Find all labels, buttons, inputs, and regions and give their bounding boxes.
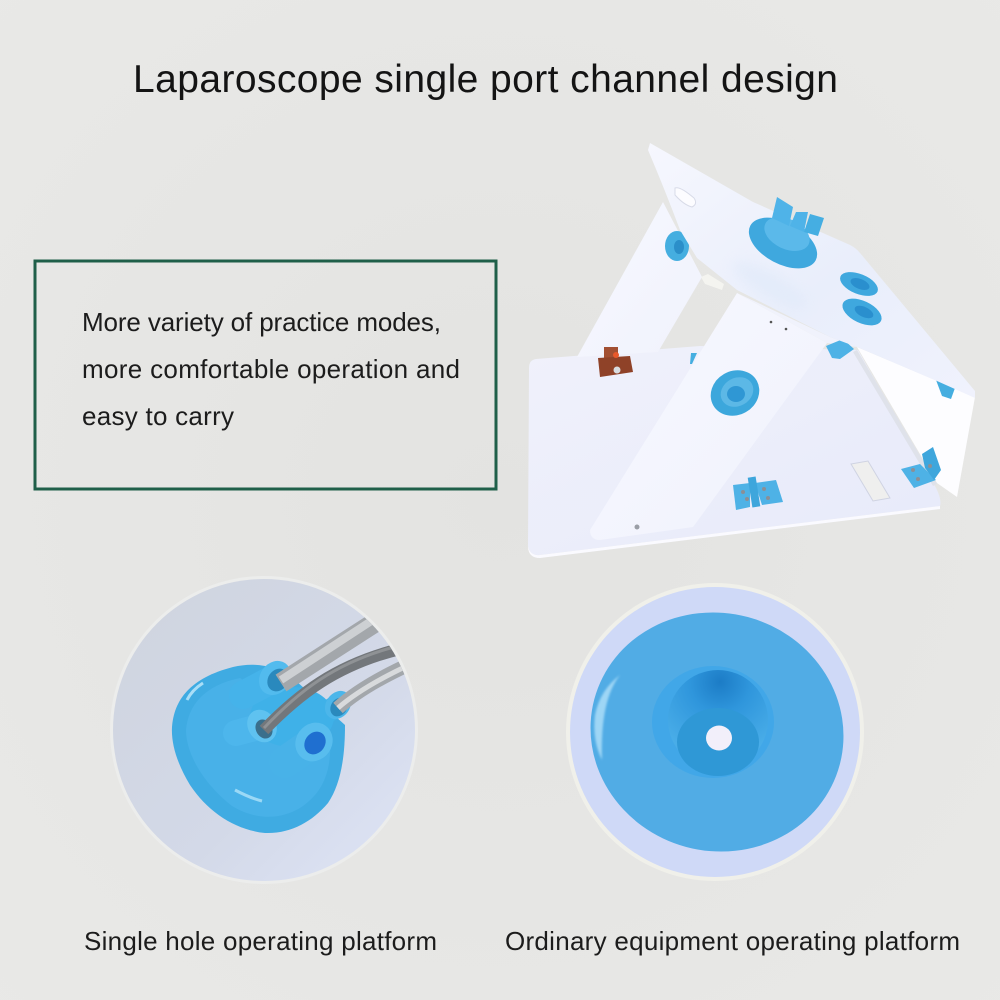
port collars: [241, 655, 356, 769]
small blue tab behind panel: [690, 353, 697, 364]
panel shading: [728, 254, 812, 316]
small screw: [634, 524, 640, 530]
product photo: folding training platform: [528, 143, 975, 558]
red hinge: [598, 347, 633, 377]
right inner panel: [857, 347, 975, 497]
blue hinge, bottom: [733, 477, 783, 510]
blue hinge, top: [826, 339, 854, 359]
single port on top panel: [740, 197, 826, 279]
back panel: [577, 202, 702, 357]
photo circle: single hole operating platform: [110, 576, 418, 884]
ordinary ports on top panel: [837, 267, 886, 331]
front panel port: [702, 361, 768, 425]
front slanted panel: [590, 293, 827, 540]
description text: easy to carry: [82, 401, 234, 431]
small hinge in inner panel: [936, 380, 955, 399]
blue port dome: [172, 665, 345, 833]
label: single hole: Single hole operating platform: [84, 926, 437, 956]
recessed centre: [652, 666, 774, 778]
rear upright with dots: [737, 293, 857, 347]
centre hole: [706, 726, 732, 750]
top tilted panel: [648, 143, 975, 398]
base plate: [528, 346, 940, 555]
panel: description text box: [35, 261, 496, 489]
description text: More variety of practice modes,: [82, 307, 441, 337]
label: ordinary equipment: Ordinary equipment operating platform: [505, 926, 960, 956]
blue hinge, right: [901, 447, 941, 488]
title: Laparoscope single port channel design: [133, 58, 838, 101]
photo circle: ordinary equipment operating platform: [564, 583, 870, 881]
blue silicone disc: [564, 584, 870, 880]
steel instruments: [264, 614, 410, 730]
description text: more comfortable operation and: [82, 354, 460, 384]
slot: [851, 461, 890, 501]
white latch: [675, 188, 696, 207]
description text: [82, 307, 460, 431]
left port: [665, 231, 689, 261]
